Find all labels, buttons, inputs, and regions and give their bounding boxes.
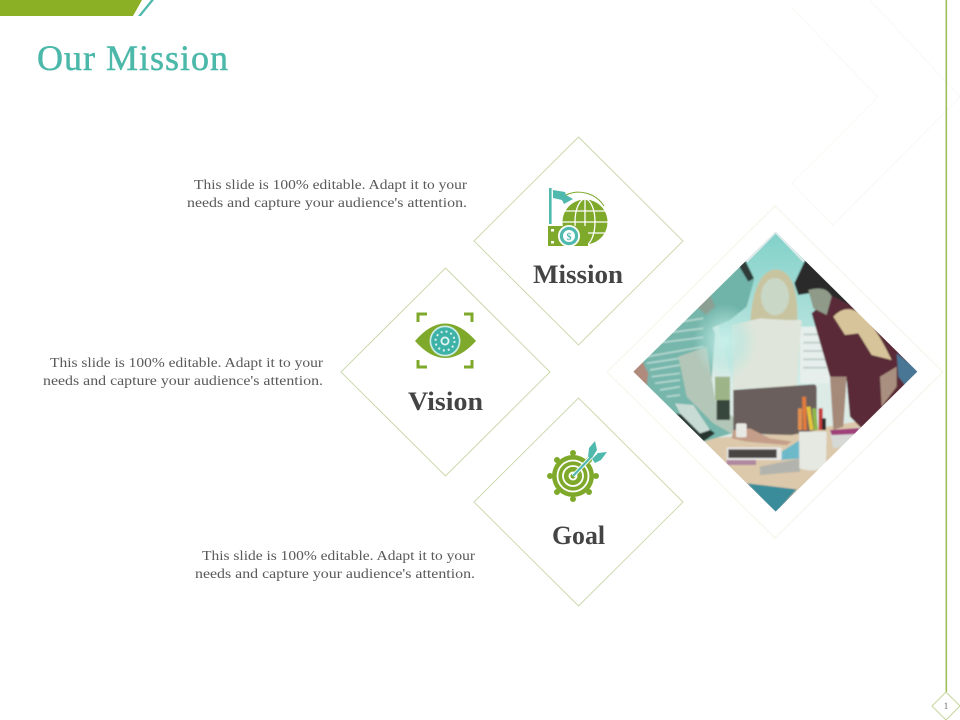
panel: vision text bbox=[43, 355, 324, 388]
pens and cup bbox=[800, 397, 824, 430]
panel: vision text: needs and capture your audience's attention. bbox=[43, 373, 323, 388]
decorative faint diamonds top right bbox=[792, 0, 960, 225]
right vertical rule bbox=[946, 0, 947, 692]
panel: goal text bbox=[195, 548, 476, 581]
label: Goal: Goal bbox=[552, 521, 605, 550]
label: Mission: Mission bbox=[533, 260, 624, 289]
soft edge highlight bbox=[747, 232, 804, 262]
panel: goal diamond bbox=[474, 398, 683, 606]
photo: team around a laptop bbox=[630, 228, 923, 520]
icon: target with arrow bbox=[547, 441, 607, 502]
page number badge bbox=[932, 692, 960, 720]
panel: vision diamond bbox=[341, 268, 550, 476]
panel: goal text: needs and capture your audience's attention. bbox=[195, 566, 475, 581]
panel: mission text: This slide is 100% editable. Adapt it to your bbox=[194, 177, 468, 192]
panel: mission text: needs and capture your audience's attention. bbox=[187, 195, 467, 210]
icon: flag, globe and money: $ bbox=[566, 232, 572, 243]
page number badge: 1 bbox=[944, 701, 948, 711]
panel: mission text bbox=[187, 177, 468, 210]
right person bbox=[812, 293, 920, 430]
title: Our Mission bbox=[37, 38, 228, 78]
panel: vision text: This slide is 100% editable. Adapt it to your bbox=[50, 355, 324, 370]
laptop bbox=[733, 384, 817, 435]
header accent band bbox=[0, 0, 154, 16]
panel: mission diamond bbox=[474, 137, 683, 345]
table bbox=[704, 421, 862, 507]
label: Vision: Vision bbox=[408, 387, 484, 416]
glow bbox=[697, 308, 752, 373]
panel: goal text: This slide is 100% editable. Adapt it to your bbox=[202, 548, 476, 563]
background bbox=[693, 326, 856, 442]
hand and watch bbox=[732, 428, 792, 445]
center person bbox=[750, 268, 798, 321]
icon: flag, globe and money bbox=[548, 188, 609, 247]
panel: photo frame diamond bbox=[607, 206, 943, 538]
left person bbox=[642, 308, 732, 442]
tablet bbox=[727, 447, 782, 460]
icon: eye bbox=[415, 314, 476, 367]
